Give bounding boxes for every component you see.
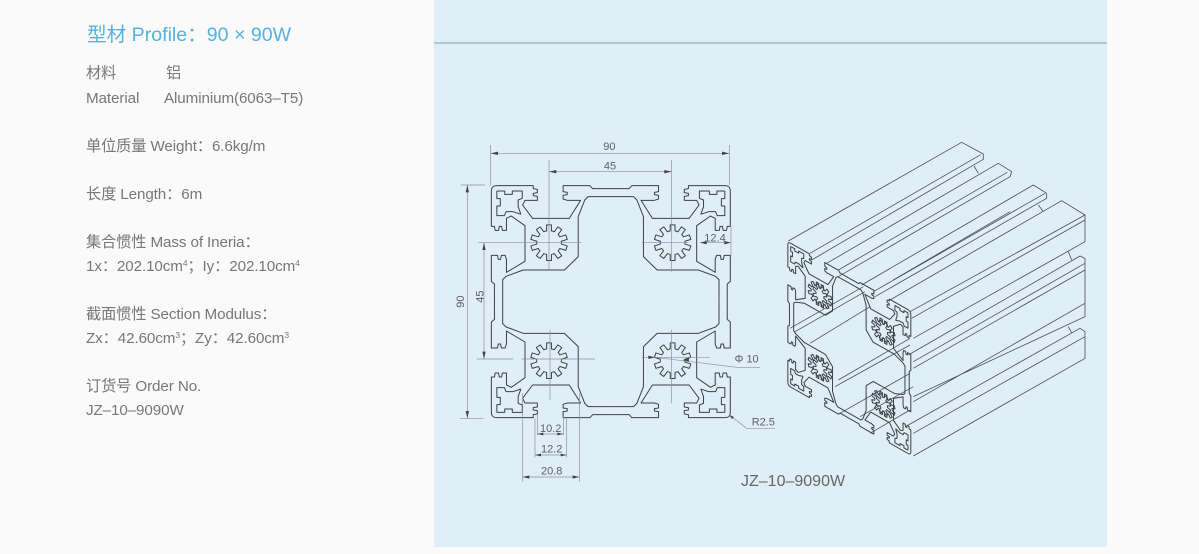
dimension: slot pitch 45 vertical bbox=[474, 243, 486, 359]
spec: mass of inertia: 1x：202.10cm4；Iy：202.10cm4 bbox=[86, 258, 300, 275]
divider rule bbox=[434, 42, 1107, 44]
panel: drawing background bbox=[434, 0, 1107, 547]
star bore depth bbox=[813, 280, 895, 422]
dimension: 10.2 bbox=[537, 415, 563, 435]
spec: order number: JZ–10–9090W bbox=[86, 402, 184, 419]
centre lines bbox=[477, 160, 710, 403]
dimension: 12.4 bbox=[700, 227, 731, 257]
spec: section modulus: 截面惯性 Section Modulus： bbox=[86, 306, 276, 323]
spec: length: 长度 Length：6m bbox=[86, 186, 202, 203]
caption: model number: JZ–10–9090W bbox=[741, 473, 846, 490]
spec: section modulus bbox=[86, 306, 289, 347]
title: 型材 Profile：90 × 90W bbox=[87, 24, 291, 46]
spec: weight: 单位质量 Weight：6.6kg/m bbox=[86, 138, 265, 155]
spec: material: Aluminium(6063–T5) bbox=[164, 90, 303, 107]
dimension: 12.2 bbox=[535, 418, 567, 457]
technical drawing: cross section with dimensions bbox=[455, 141, 775, 482]
dimension: diameter 10: Φ 10 bbox=[735, 354, 759, 366]
dimension: overall height 90: 90 bbox=[455, 296, 467, 308]
spec: section modulus: Zx：42.60cm3；Zy：42.60cm3 bbox=[86, 330, 289, 347]
spec: material: 材料 bbox=[86, 65, 116, 82]
extrusion lines bbox=[788, 142, 1085, 456]
spec: order number: 订货号 Order No. bbox=[86, 378, 201, 395]
end face bbox=[788, 242, 911, 455]
spec: material: 铝 bbox=[166, 65, 181, 82]
dimension: overall height 90 bbox=[455, 185, 485, 418]
dimension: slot pitch 45 bbox=[549, 160, 672, 173]
dimension: 20.8 bbox=[523, 393, 579, 482]
dimension: radius 2.5: R2.5 bbox=[752, 416, 775, 428]
spec: order number bbox=[86, 378, 201, 419]
dimension: slot pitch 45: 45 bbox=[604, 160, 616, 172]
dimension: overall width 90: 90 bbox=[603, 141, 615, 153]
spec: mass of inertia: 集合惯性 Mass of Ineria： bbox=[86, 234, 260, 251]
dimension: 12.4: 12.4 bbox=[704, 232, 726, 244]
dimension: slot pitch 45 vertical: 45 bbox=[474, 291, 486, 303]
spec: material: Material bbox=[86, 90, 139, 107]
dimension: 12.2: 12.2 bbox=[541, 443, 562, 455]
dimension: diameter 10 bbox=[648, 354, 760, 367]
spec: mass of inertia bbox=[86, 234, 300, 275]
dimension: 20.8: 20.8 bbox=[541, 465, 562, 477]
dimension: 10.2: 10.2 bbox=[540, 423, 561, 435]
profile cross section bbox=[491, 186, 730, 418]
dimension: radius 2.5 bbox=[729, 415, 775, 428]
spec: material bbox=[86, 64, 303, 107]
isometric view of profile bbox=[788, 142, 1085, 456]
dimension: overall width 90 bbox=[491, 141, 729, 185]
